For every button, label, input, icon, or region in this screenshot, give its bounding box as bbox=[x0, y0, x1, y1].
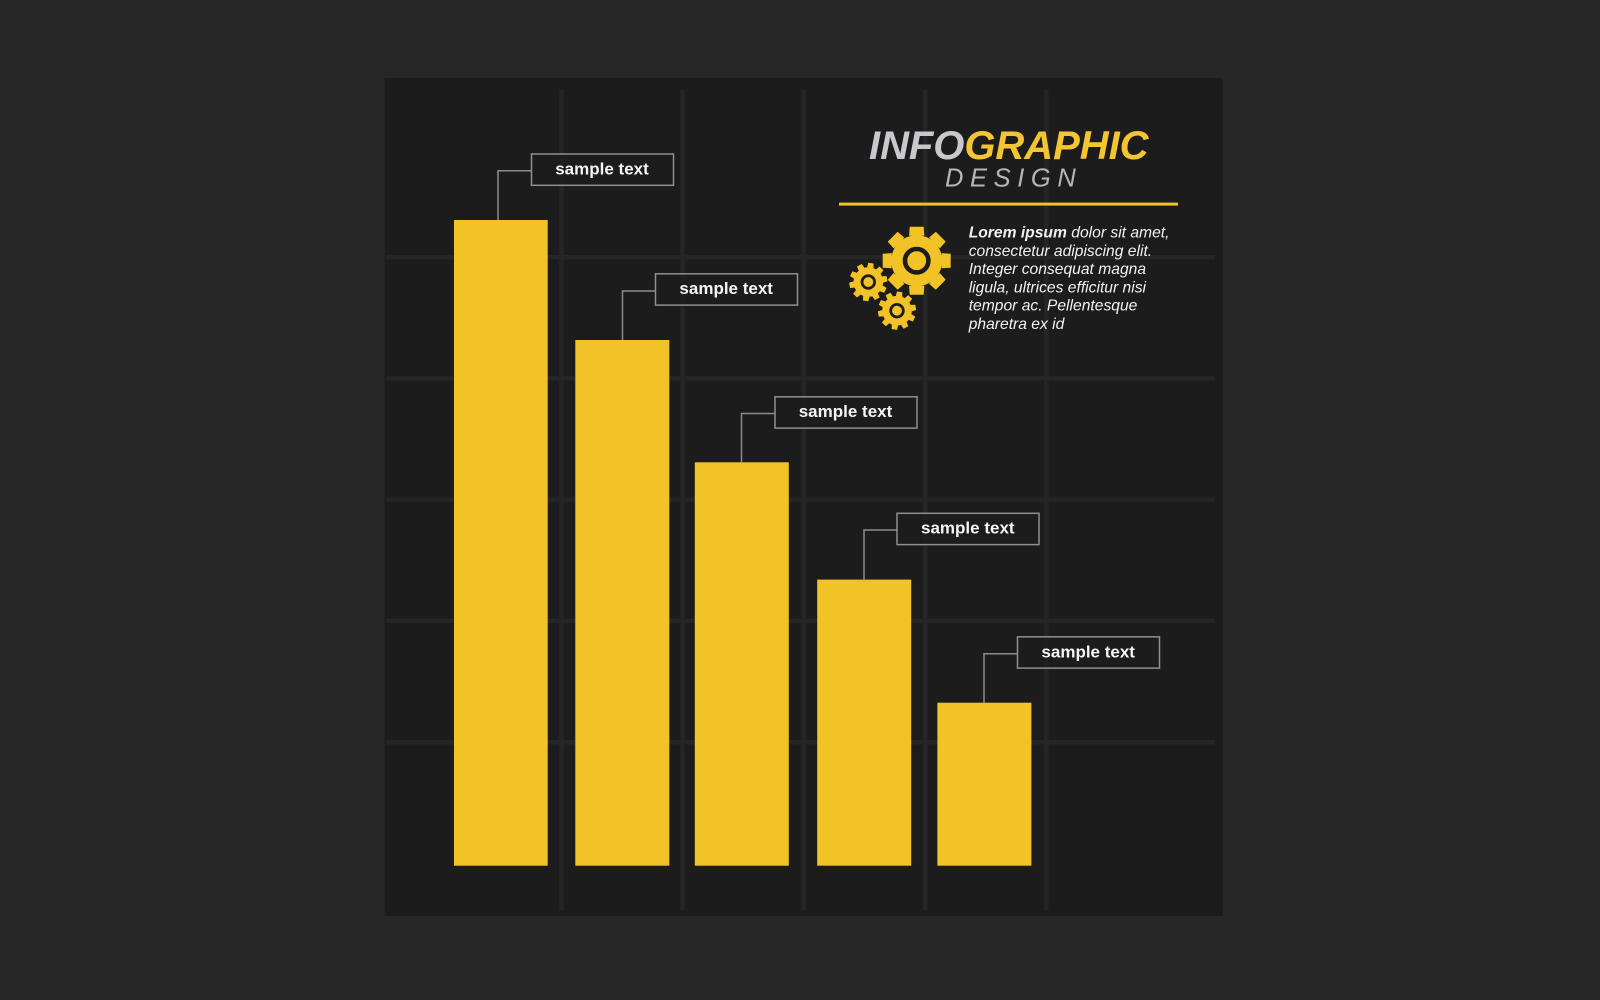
text block: lorem ipsum: consectetur adipiscing elit. bbox=[969, 243, 1152, 260]
bar 2 bbox=[575, 340, 669, 866]
icon: gears bbox=[847, 227, 951, 332]
bar 1 bbox=[454, 220, 548, 866]
icon: small gear bottom bbox=[875, 289, 919, 332]
callout 2: sample text bbox=[679, 279, 773, 298]
text block: lorem ipsum: tempor ac. Pellentesque bbox=[969, 298, 1138, 315]
text block: lorem ipsum: pharetra ex id bbox=[968, 316, 1066, 333]
callout 3 bbox=[742, 397, 917, 462]
text block: lorem ipsum: Lorem ipsum dolor sit amet, bbox=[969, 225, 1169, 242]
callout 5 bbox=[984, 637, 1160, 703]
callout 4: sample text bbox=[921, 519, 1015, 538]
icon: large gear bbox=[883, 227, 951, 295]
icon: small gear left bbox=[847, 261, 890, 303]
callout 1: sample text bbox=[555, 159, 649, 178]
callout 1 bbox=[498, 154, 674, 220]
callout 3: sample text bbox=[799, 402, 893, 421]
text block: lorem ipsum: ligula, ultrices efficitur nisi bbox=[969, 279, 1147, 296]
panel: dark chart background bbox=[384, 78, 1223, 916]
bar 4 bbox=[817, 580, 911, 866]
divider line bbox=[839, 203, 1178, 206]
callout 5: sample text bbox=[1041, 642, 1135, 661]
bar 5 bbox=[937, 703, 1031, 866]
bar 3 bbox=[695, 462, 789, 866]
bar chart bbox=[454, 220, 1031, 866]
callout 2 bbox=[622, 274, 798, 340]
text block: lorem ipsum: Integer consequat magna bbox=[969, 261, 1146, 278]
title: INFOGRAPHIC bbox=[869, 124, 1150, 168]
subtitle: DESIGN bbox=[945, 165, 1082, 193]
callout 4 bbox=[864, 513, 1039, 580]
